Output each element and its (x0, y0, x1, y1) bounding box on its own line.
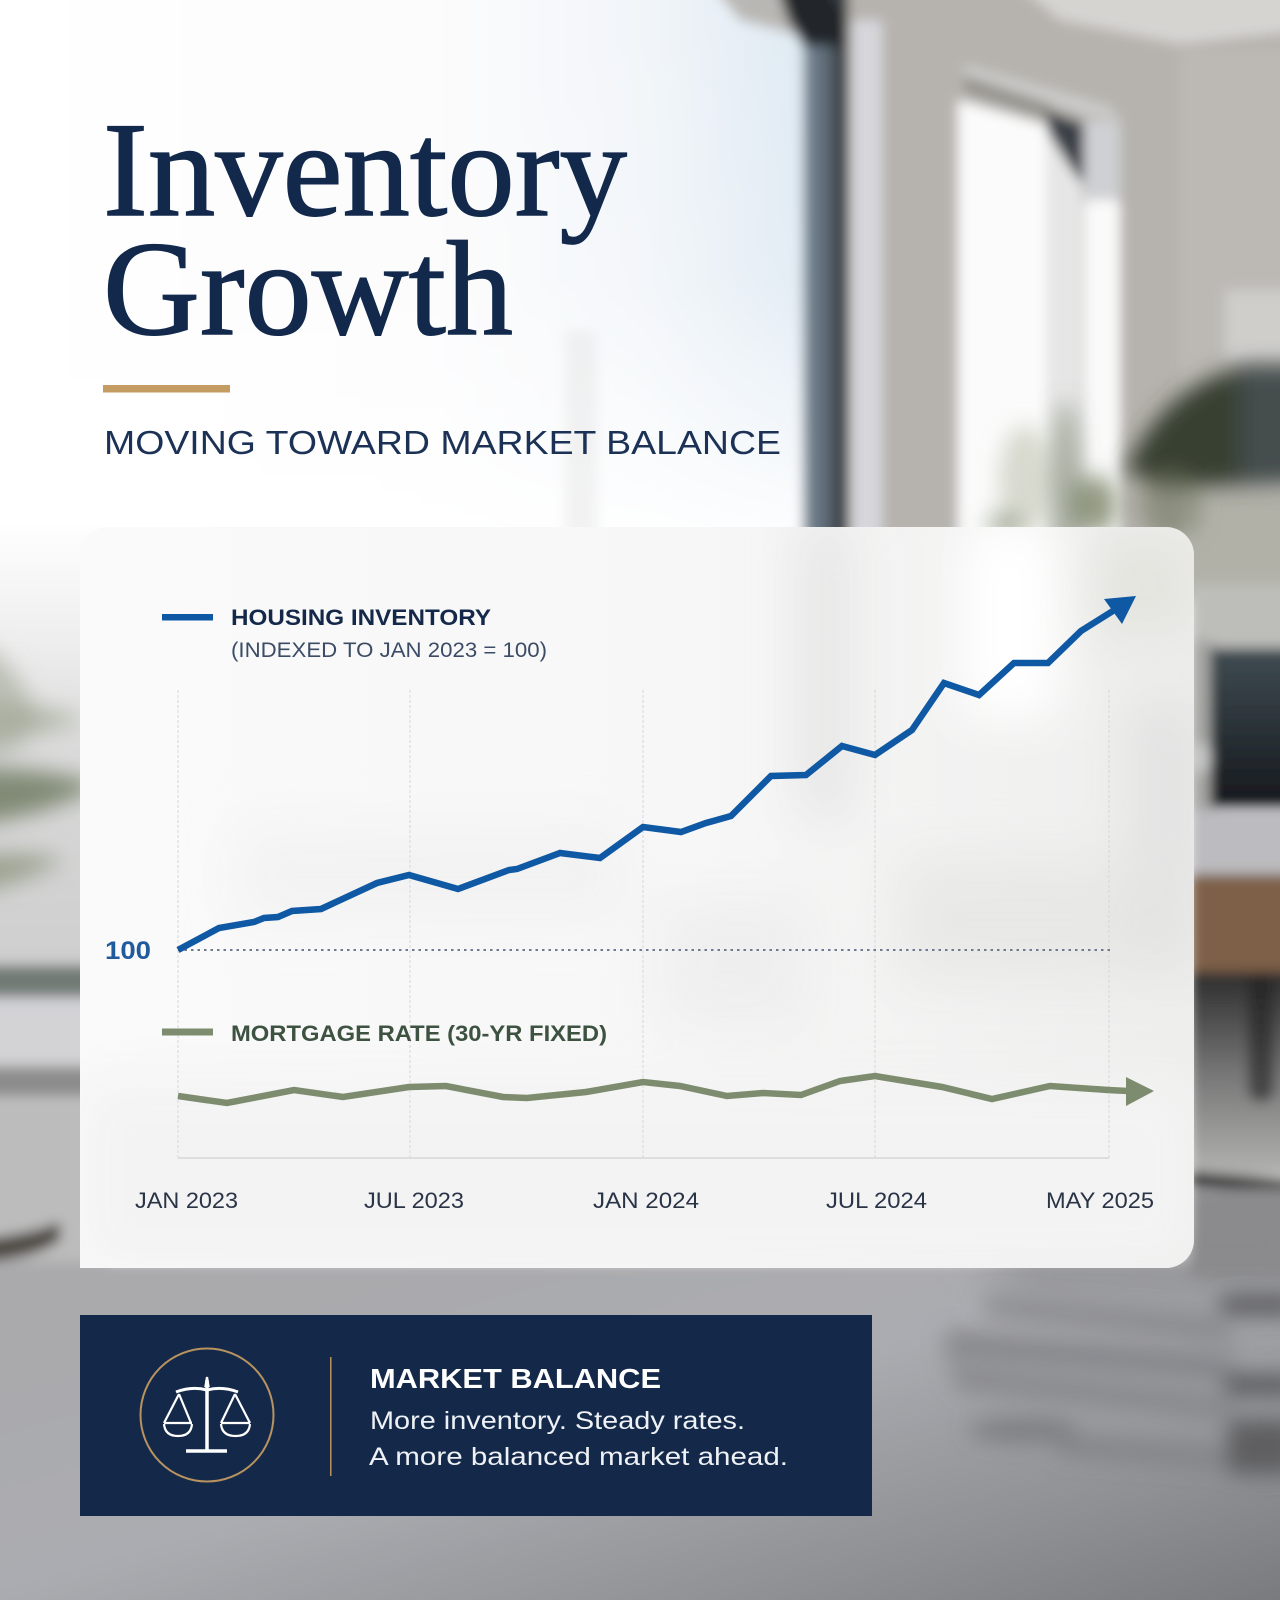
callout text: A more balanced market ahead. (369, 1443, 788, 1471)
icon: balance scales in gold circle (140, 1348, 274, 1482)
callout text (369, 1363, 788, 1471)
line: mortgage rate with arrow (178, 1076, 1154, 1106)
title: Inventory (103, 96, 627, 245)
gold accent rule (103, 385, 230, 392)
legend: housing inventory: (INDEXED TO JAN 2023 = 100) (231, 639, 547, 662)
legend: housing inventory (162, 605, 547, 662)
legend: housing inventory: HOUSING INVENTORY (231, 605, 491, 630)
panel: market balance callout (80, 1315, 872, 1516)
decorative left-side plant (0, 640, 100, 895)
panel: chart card (80, 520, 1200, 1270)
divider (330, 1357, 332, 1476)
x-axis labels: JAN 2024 (593, 1188, 699, 1213)
x-axis labels (135, 1188, 1154, 1213)
x-axis labels: JUL 2023 (364, 1188, 464, 1213)
legend: mortgage rate: MORTGAGE RATE (30-YR FIXED) (231, 1021, 607, 1046)
x-axis labels: MAY 2025 (1046, 1188, 1154, 1213)
chart: baseline at 100 (178, 949, 1112, 951)
subtitle: MOVING TOWARD MARKET BALANCE (104, 424, 781, 461)
chart: grid lines and axis (178, 690, 1109, 1158)
decorative stacked papers (1000, 1250, 1280, 1290)
x-axis labels: JUL 2024 (826, 1188, 927, 1213)
decorative left-side shelf (0, 965, 100, 997)
decorative plant near second window (987, 365, 1280, 580)
title (103, 96, 627, 364)
decorative right-side desk and monitor (1190, 490, 1280, 586)
label: 100: 100 (105, 937, 151, 965)
callout text: More inventory. Steady rates. (370, 1407, 745, 1435)
title: Growth (103, 215, 513, 364)
callout text: MARKET BALANCE (370, 1363, 661, 1394)
x-axis labels: JAN 2023 (135, 1188, 238, 1213)
floor (0, 1262, 1280, 1600)
line: housing inventory with arrow (178, 596, 1136, 950)
